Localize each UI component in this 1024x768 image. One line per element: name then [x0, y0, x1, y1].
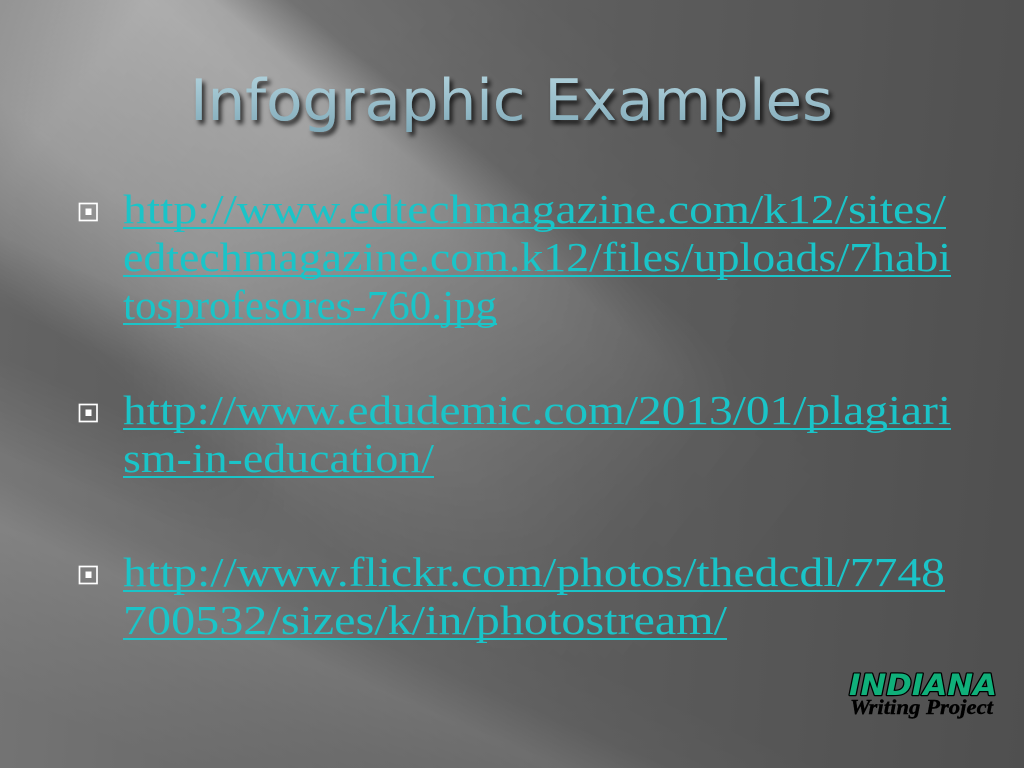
link 1: [123, 186, 951, 328]
background: [0, 0, 710, 768]
link 1: edtechmagazine.com.k12/files/uploads/7habi: [123, 234, 951, 280]
link 2: sm-in-education/: [123, 435, 435, 481]
title: Infographic Examples: [190, 68, 833, 134]
link 2: [123, 387, 951, 481]
link 2: http://www.edudemic.com/2013/01/plagiari: [123, 387, 951, 433]
link 3: http://www.flickr.com/photos/thedcdl/7748: [123, 549, 945, 595]
bullet item 1: [80, 186, 951, 328]
link 3: 700532/sizes/k/in/photostream/: [123, 597, 728, 643]
logo: Indiana Writing Project: [849, 668, 997, 719]
bullet item 3: [80, 549, 945, 643]
logo: Indiana Writing Project: INDIANA: [849, 668, 997, 702]
bullet icon 2: [80, 404, 97, 422]
bullet list: [80, 186, 951, 643]
bullet item 2: [80, 387, 951, 481]
bullet icon 1: [80, 204, 97, 220]
logo: Indiana Writing Project: Writing Project: [850, 695, 994, 719]
link 3: [123, 549, 945, 643]
link 1: http://www.edtechmagazine.com/k12/sites/: [123, 186, 947, 232]
link 1: tosprofesores-760.jpg: [123, 282, 497, 328]
bullet icon 3: [80, 566, 97, 584]
